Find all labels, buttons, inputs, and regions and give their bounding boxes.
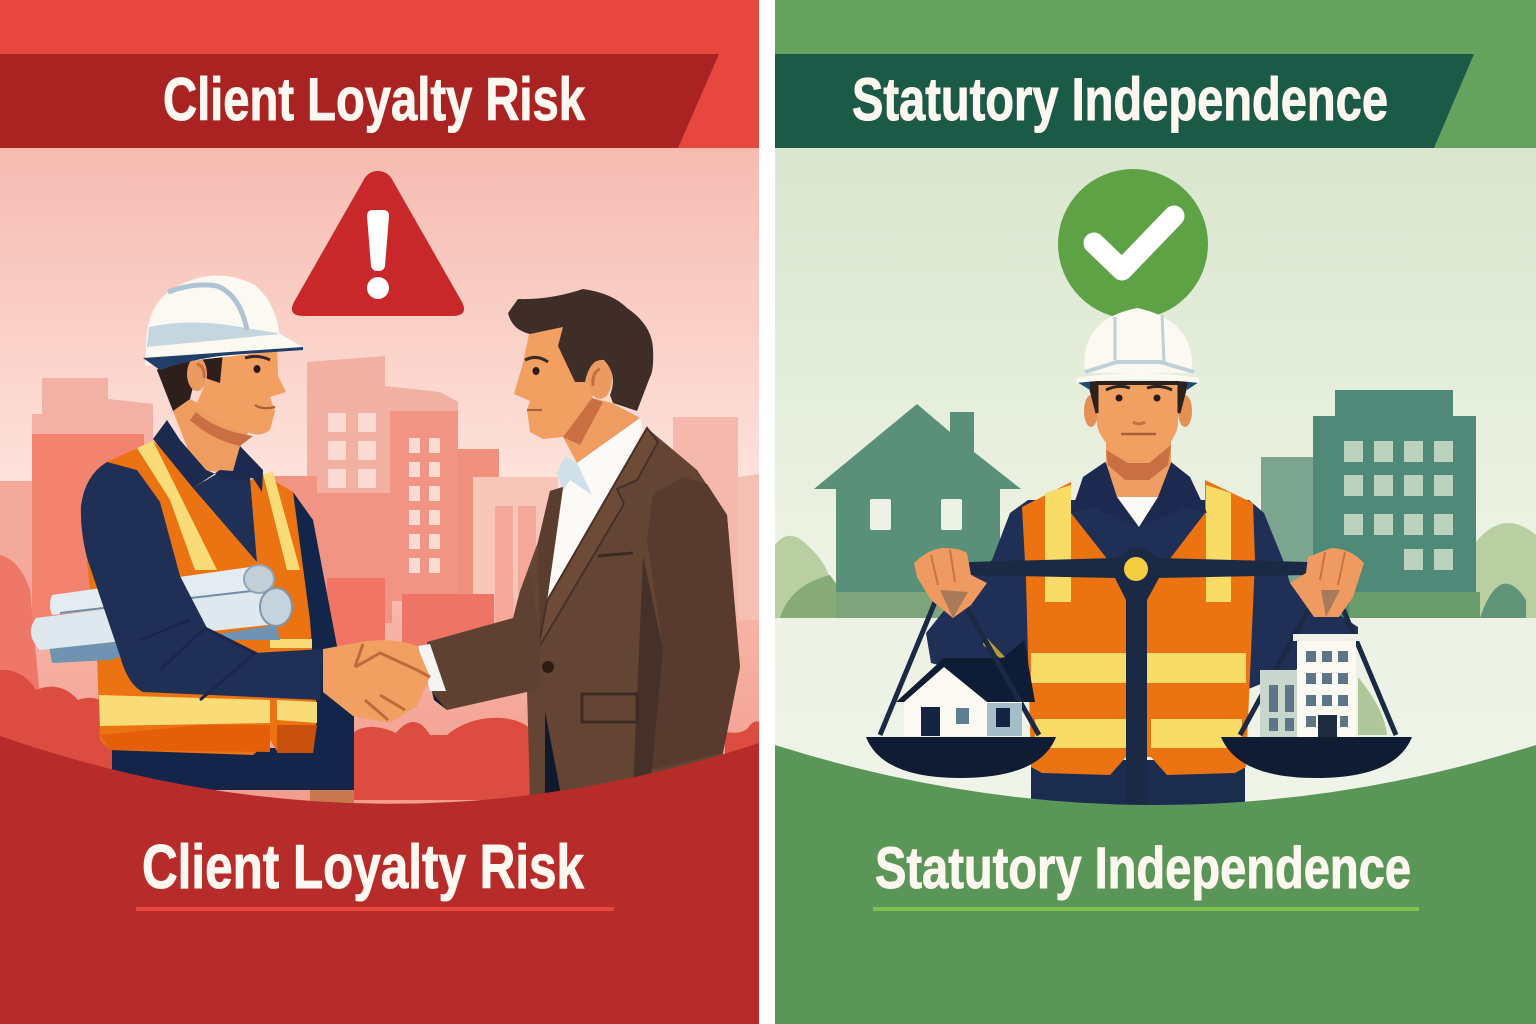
- collar and shirt: [1071, 462, 1207, 527]
- shirt front: [1071, 513, 1205, 570]
- illustration: client in brown suit: [427, 289, 740, 800]
- jacket: [520, 428, 740, 800]
- balance scale with house and building: [866, 547, 1412, 804]
- scale beam: [969, 547, 1308, 600]
- head: [196, 346, 286, 434]
- jacket arm shade: [633, 477, 740, 773]
- body and sleeves: [926, 500, 1358, 690]
- heading banner: client loyalty risk: [0, 54, 719, 148]
- hard hat: [1077, 380, 1199, 390]
- panel: client loyalty risk: [0, 0, 759, 1024]
- panel: statutory independence: [775, 0, 1536, 1024]
- bottom red curve: [0, 736, 759, 1024]
- safety vest: [87, 441, 317, 755]
- city skyline background: [0, 356, 759, 800]
- head: [514, 327, 600, 439]
- caption: statutory independence: Statutory Independence: [875, 836, 1411, 901]
- dark trouser gap: [545, 711, 562, 800]
- white shirt: [547, 418, 643, 601]
- blueprint rolls: [31, 565, 292, 663]
- icon: check mark: [1058, 169, 1208, 319]
- hair: [508, 289, 653, 411]
- heading banner: client loyalty risk: Client Loyalty Risk: [163, 66, 585, 133]
- trousers: [1031, 760, 1245, 810]
- scenery: house, building and trees: [775, 390, 1536, 618]
- near arm: [81, 462, 323, 700]
- heading banner: statutory independence: Statutory Independence: [852, 66, 1388, 133]
- scale pole: [1126, 580, 1147, 804]
- right pan with building: [1221, 634, 1412, 778]
- illustration: engineer with blueprints: [31, 276, 354, 805]
- neck: [563, 398, 640, 463]
- vest reflective stripes: [99, 441, 317, 726]
- hard hat: [145, 276, 303, 366]
- lapel: [538, 428, 658, 649]
- neck and head: [1106, 440, 1171, 497]
- left pan with house: [866, 667, 1056, 778]
- illustration: inspector in vest: [926, 308, 1358, 810]
- heading banner: statutory independence: [775, 54, 1474, 148]
- icon: warning triangle: [292, 171, 464, 316]
- safety vest: [1022, 480, 1255, 775]
- hands: [914, 548, 1364, 618]
- bottom green curve: [775, 745, 1536, 1024]
- caption: client loyalty risk: Client Loyalty Risk: [142, 833, 584, 902]
- shirt front: [193, 470, 257, 562]
- far sleeve and trousers: [112, 492, 354, 790]
- left sleeve cuff and dark shadow: [896, 640, 1035, 702]
- near sleeve: [427, 570, 540, 710]
- handshake: [323, 640, 446, 723]
- scale strands: [880, 587, 1396, 735]
- neck and collar: [173, 399, 250, 473]
